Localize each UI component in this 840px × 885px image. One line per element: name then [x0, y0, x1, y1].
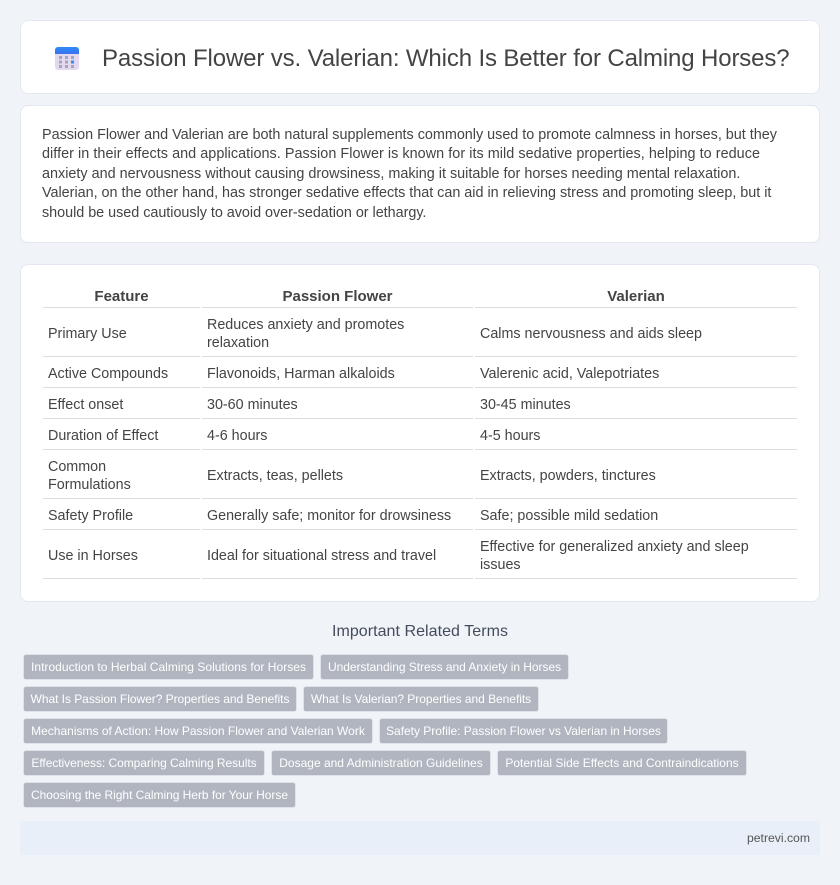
tag: Effectiveness: Comparing Calming Results: [31, 756, 257, 770]
row: Active Compounds: Flavonoids, Harman alkaloids: [207, 366, 395, 382]
comparison table: [43, 288, 797, 579]
panel: introduction text: [20, 105, 820, 243]
tag: [23, 686, 297, 712]
intro paragraph: Passion Flower and Valerian are both natural supplements commonly used to promote calmness in horses, but they: [42, 127, 777, 143]
row: Use in Horses: Use in Horses: [48, 548, 138, 564]
table header: Valerian: Valerian: [607, 288, 665, 305]
row: Duration of Effect: 4-5 hours: [480, 428, 540, 444]
header panel: [20, 20, 820, 94]
related terms tags: [23, 654, 747, 808]
tag: [320, 654, 569, 680]
row: Primary Use: Calms nervousness and aids sleep: [480, 326, 702, 342]
table header: Feature: Feature: [94, 288, 149, 305]
row: Active Compounds: [48, 366, 659, 382]
footer source: petrevi.com: petrevi.com: [747, 831, 810, 845]
intro paragraph: should be used cautiously to avoid over-sedation or lethargy.: [42, 205, 426, 221]
row: Common Formulations: Common: [48, 459, 106, 475]
tag: Safety Profile: Passion Flower vs Valerian in Horses: [386, 724, 661, 738]
row: Effect onset: Effect onset: [48, 397, 123, 413]
heading: Important Related Terms: Important Related Terms: [332, 623, 508, 640]
row: Effect onset: [48, 397, 571, 413]
row: Use in Horses: Ideal for situational stress and travel: [207, 548, 436, 564]
row: Duration of Effect: 4-6 hours: [207, 428, 267, 444]
tag: What Is Passion Flower? Properties and Benefits: [31, 692, 289, 706]
tag: [23, 654, 314, 680]
intro paragraph: differ in their effects and applications. Passion Flower is known for its mild sedative properties, helping to reduce: [42, 146, 760, 162]
row: Use in Horses: Effective for generalized anxiety and sleep: [480, 539, 749, 555]
intro paragraph: Valerian, on the other hand, has stronger sedative effects that can aid in relieving stress and promoting sleep, but it: [42, 185, 771, 201]
panel: comparison table: [20, 264, 820, 602]
row: Safety Profile: Safe; possible mild sedation: [480, 508, 658, 524]
row: Primary Use: Reduces anxiety and promotes: [207, 317, 404, 333]
tag: Dosage and Administration Guidelines: [279, 756, 483, 770]
tag: Introduction to Herbal Calming Solutions for Horses: [31, 660, 306, 674]
row: Common Formulations: Extracts, powders, tinctures: [480, 468, 656, 484]
tag: [379, 718, 668, 744]
row: Duration of Effect: [48, 428, 540, 444]
tag: Choosing the Right Calming Herb for Your Horse: [31, 788, 288, 802]
row: Primary Use: relaxation: [207, 335, 269, 351]
tag: [23, 718, 373, 744]
row: Safety Profile: Safety Profile: [48, 508, 133, 524]
intro paragraph: anxiety and nervousness without causing drowsiness, making it suitable for horses needing mental relaxation.: [42, 166, 740, 182]
row: Active Compounds: Valerenic acid, Valepotriates: [480, 366, 659, 382]
row: Common Formulations: [48, 459, 656, 493]
tag: [271, 750, 491, 776]
row: Common Formulations: Extracts, teas, pellets: [207, 468, 343, 484]
row: Use in Horses: issues: [480, 557, 521, 573]
table header: Passion Flower: Passion Flower: [282, 288, 393, 305]
intro paragraph: [42, 127, 777, 221]
tag: Mechanisms of Action: How Passion Flower and Valerian Work: [31, 724, 365, 738]
tag: What Is Valerian? Properties and Benefits: [311, 692, 531, 706]
row: Primary Use: [48, 317, 702, 351]
tag: [23, 750, 265, 776]
row: Effect onset: 30-60 minutes: [207, 397, 298, 413]
tag: [497, 750, 747, 776]
row: Duration of Effect: Duration of Effect: [48, 428, 158, 444]
tag: Understanding Stress and Anxiety in Horses: [328, 660, 561, 674]
title: Passion Flower vs. Valerian: Which Is Better for Calming Horses?: [102, 45, 789, 72]
row: Primary Use: Primary Use: [48, 326, 127, 342]
tag: [303, 686, 539, 712]
tag: [23, 782, 296, 808]
row: Safety Profile: [48, 508, 658, 524]
tag: Potential Side Effects and Contraindications: [505, 756, 739, 770]
row: Active Compounds: Active Compounds: [48, 366, 168, 382]
row: Use in Horses: [48, 539, 749, 573]
row: Safety Profile: Generally safe; monitor for drowsiness: [207, 508, 451, 524]
row: Common Formulations: Formulations: [48, 477, 131, 493]
icon: calendar: [55, 47, 79, 70]
row: Effect onset: 30-45 minutes: [480, 397, 571, 413]
footer bar: [20, 821, 820, 855]
